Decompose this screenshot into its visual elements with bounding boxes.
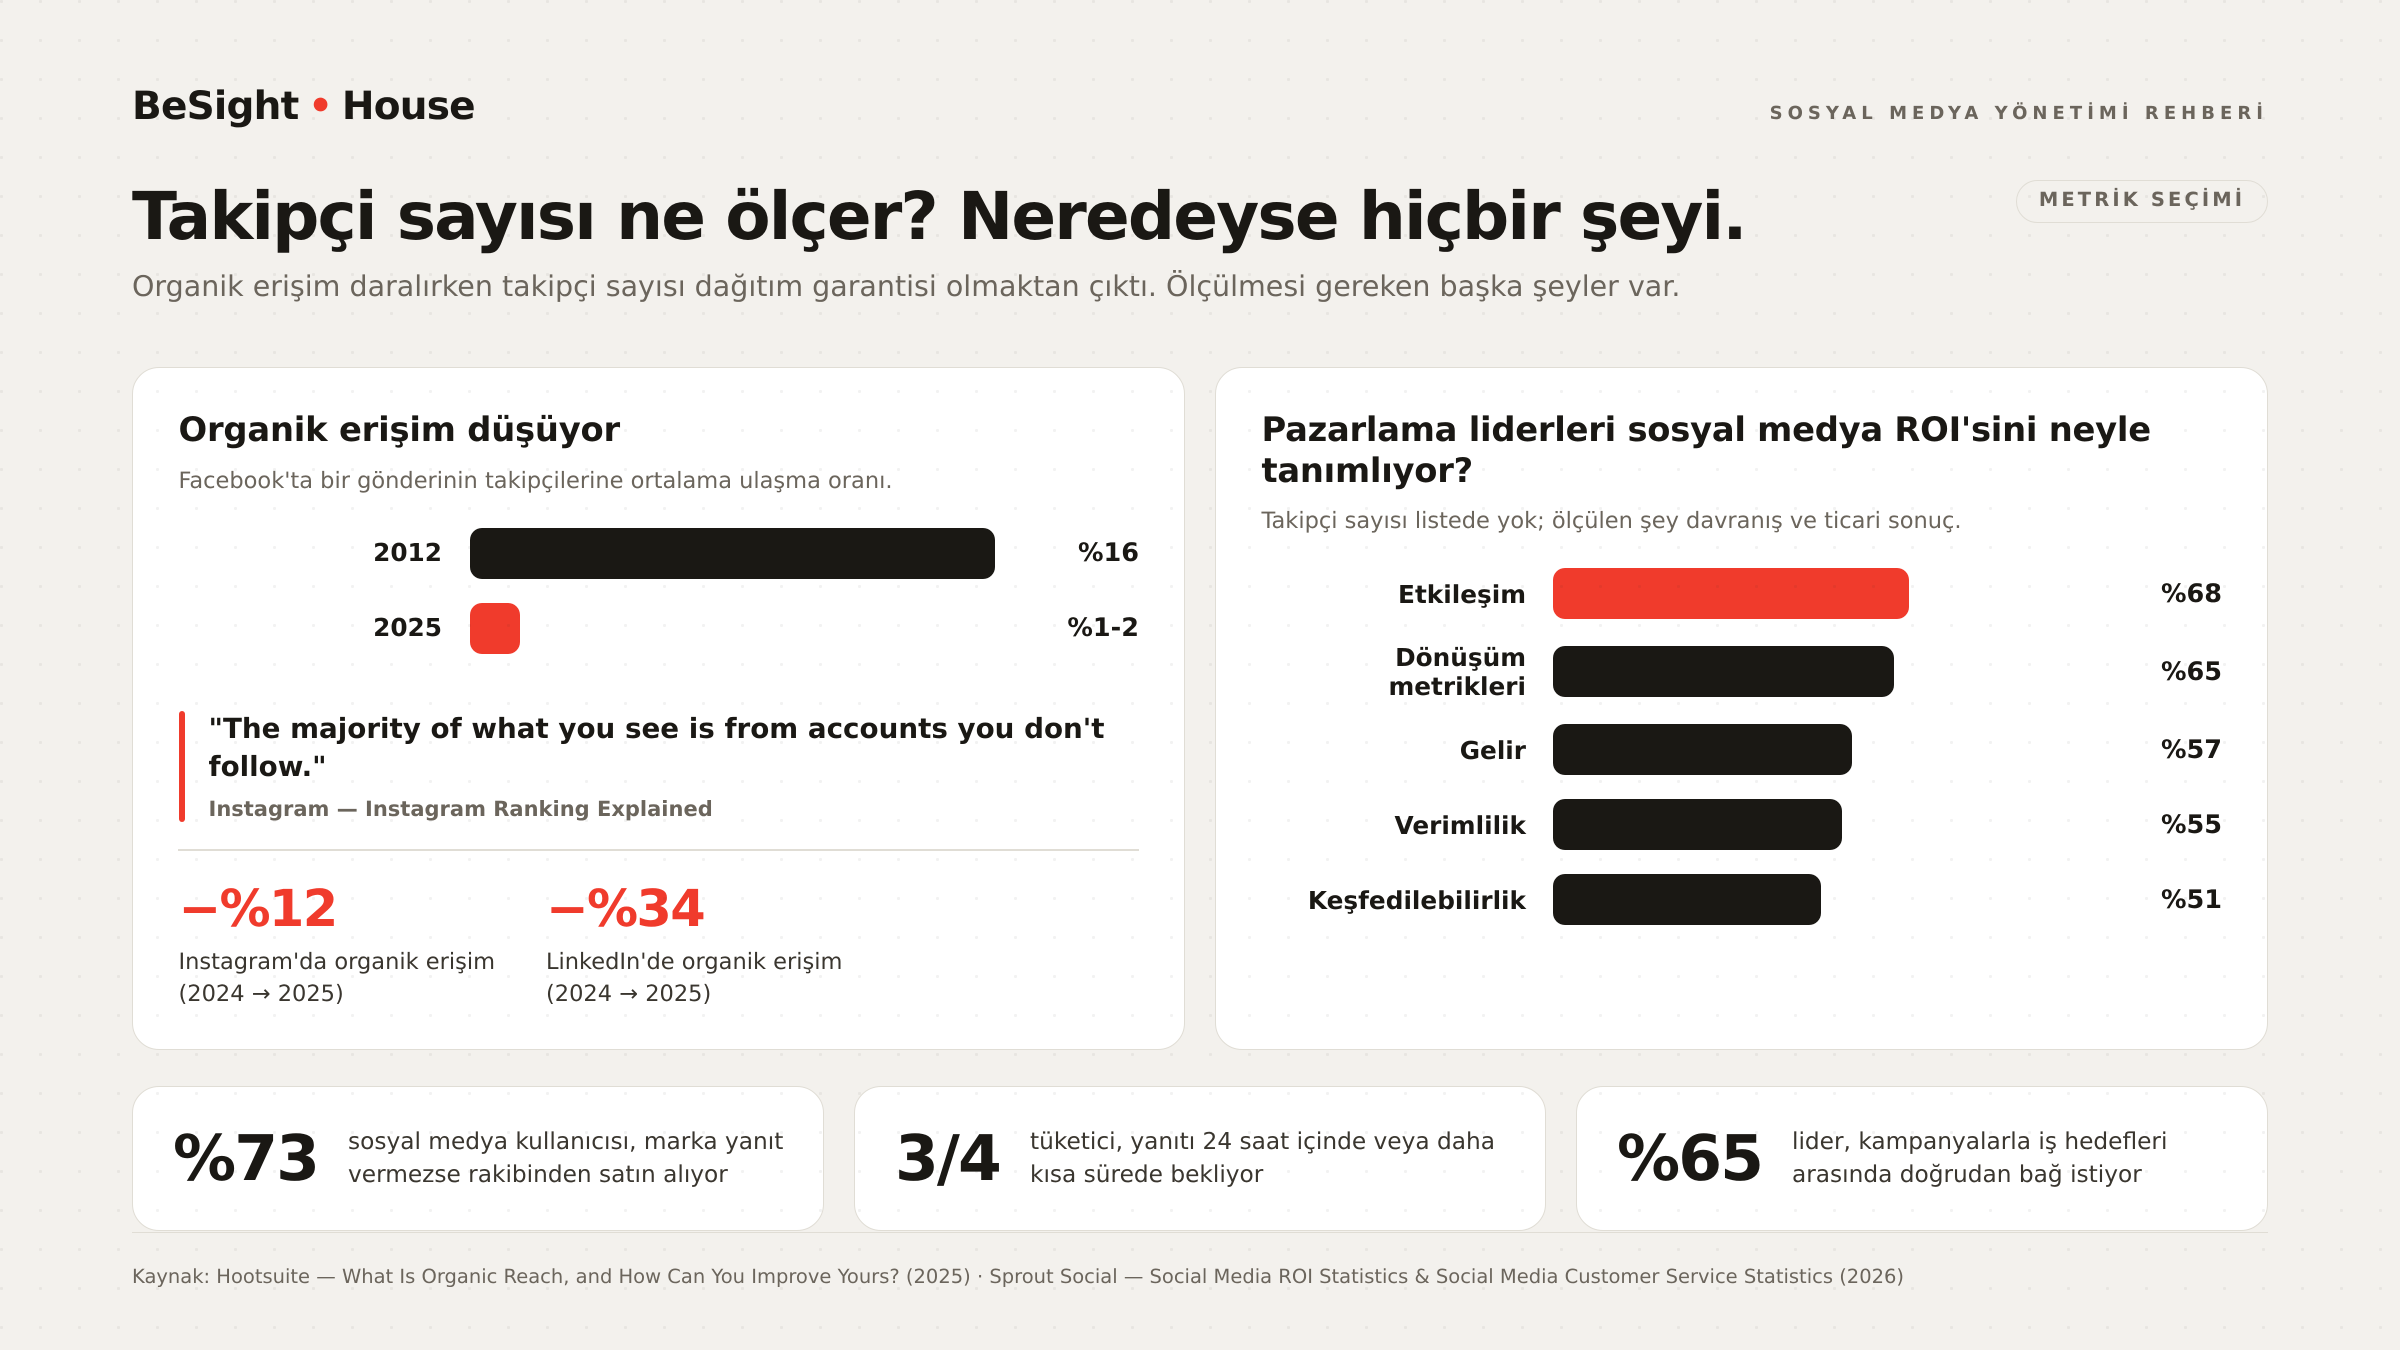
stat number: %65 [1617,1122,1762,1195]
metric pill [2016,180,2268,223]
panel subheading: Facebook'ta bir gönderinin takipçilerine ortalama ulaşma oranı. [178,468,892,494]
stat label: LinkedIn: LinkedIn'de organik erişim [546,948,842,974]
bar 2012 [470,528,994,579]
bar 2025 [470,603,520,654]
title: Takipçi sayısı ne ölçer? Neredeyse hiçbir şeyi. [132,178,1746,254]
panel heading: tanımlıyor? [1262,451,1473,490]
stat: Instagram: −%12 [178,880,337,938]
pill text: METRİK SEÇİMİ [2039,188,2245,211]
bar Gelir [1552,724,1852,775]
label Dönüşüm: metrikleri [1388,672,1526,701]
value 2025: %1-2 [1067,612,1139,642]
logo: BeSight • House [132,84,475,129]
stat label: LinkedIn: (2024 → 2025) [546,980,711,1006]
stat text: sosyal medya kullanıcısı, marka yanıt [348,1128,783,1155]
label Gelir: Gelir [1460,736,1526,764]
stat text: lider, kampanyalarla iş hedefleri [1792,1128,2167,1155]
stat text: kısa sürede bekliyor [1030,1161,1263,1188]
stat number: 3/4 [895,1122,1000,1195]
series label: SOSYAL MEDYA YÖNETİMİ REHBERİ [1770,103,2268,124]
quote source: Instagram — Instagram Ranking Explained [208,797,713,821]
stat text [1030,1128,1495,1188]
stat card: 73 [132,1086,824,1231]
panel subheading: Takipçi sayısı listede yok; ölçülen şey davranış ve ticari sonuç. [1262,508,1962,534]
stat card: 3/4 [854,1086,1546,1231]
bar Etkileşim [1552,568,1908,619]
stat text: vermezse rakibinden satın alıyor [348,1161,728,1188]
stat text [348,1128,783,1188]
bar row 2025: 2025 [373,612,442,642]
subtitle: Organik erişim daralırken takipçi sayısı dağıtım garantisi olmaktan çıktı. Ölçülmesi gereken başka şeyler var. [132,270,1680,303]
stat number: %73 [173,1122,318,1195]
value Keşfedilebilirlik: %51 [2161,884,2222,914]
stat label: Instagram: (2024 → 2025) [178,980,344,1006]
stat text [1792,1128,2167,1188]
source footer: Kaynak: Hootsuite — What Is Organic Reach, and How Can You Improve Yours? (2025) · Sprout Social — Social Media ROI Statistics & Social Media Customer Service Statistics (2026) [132,1265,1904,1288]
divider [178,849,1139,850]
footer rule [132,1232,2268,1233]
stat card: 65 [1576,1086,2268,1231]
quote [208,712,1105,783]
value Dönüşüm: %65 [2161,656,2222,686]
value 2012: %16 [1078,538,1139,568]
stat text: tüketici, yanıtı 24 saat içinde veya daha [1030,1128,1495,1155]
quote accent bar [178,711,184,822]
value Etkileşim: %68 [2161,578,2222,608]
panel: organic reach [132,367,1185,1050]
label Etkileşim: Etkileşim [1398,580,1526,608]
bar row 2012: 2012 [373,538,442,566]
bar chart: organic reach [373,528,1139,654]
quote: "The majority of what you see is from accounts you don't [208,712,1105,745]
panel heading: Pazarlama liderleri sosyal medya ROI'sini neyle [1262,410,2151,448]
label Dönüşüm [1388,643,1526,701]
stat label: Instagram [178,948,495,1006]
value Gelir: %57 [2161,734,2222,764]
panel heading: Organik erişim düşüyor [178,410,620,448]
bar Verimlilik [1552,799,1842,850]
bar Dönüşüm [1552,646,1894,697]
stat label: LinkedIn [546,948,842,1006]
bar Keşfedilebilirlik [1552,874,1820,925]
stat text: arasında doğrudan bağ istiyor [1792,1161,2142,1188]
panel: ROI definitions [1215,367,2268,1050]
stat: LinkedIn: −%34 [546,880,704,938]
value Verimlilik: %55 [2161,810,2222,840]
bar chart: ROI [1308,568,2222,925]
label Dönüşüm: Dönüşüm [1395,643,1526,672]
label Keşfedilebilirlik: Keşfedilebilirlik [1308,886,1526,914]
label Verimlilik: Verimlilik [1395,810,1526,840]
panel heading [1262,410,2151,490]
quote: follow." [208,750,327,783]
stat label: Instagram: Instagram'da organik erişim [178,948,495,974]
